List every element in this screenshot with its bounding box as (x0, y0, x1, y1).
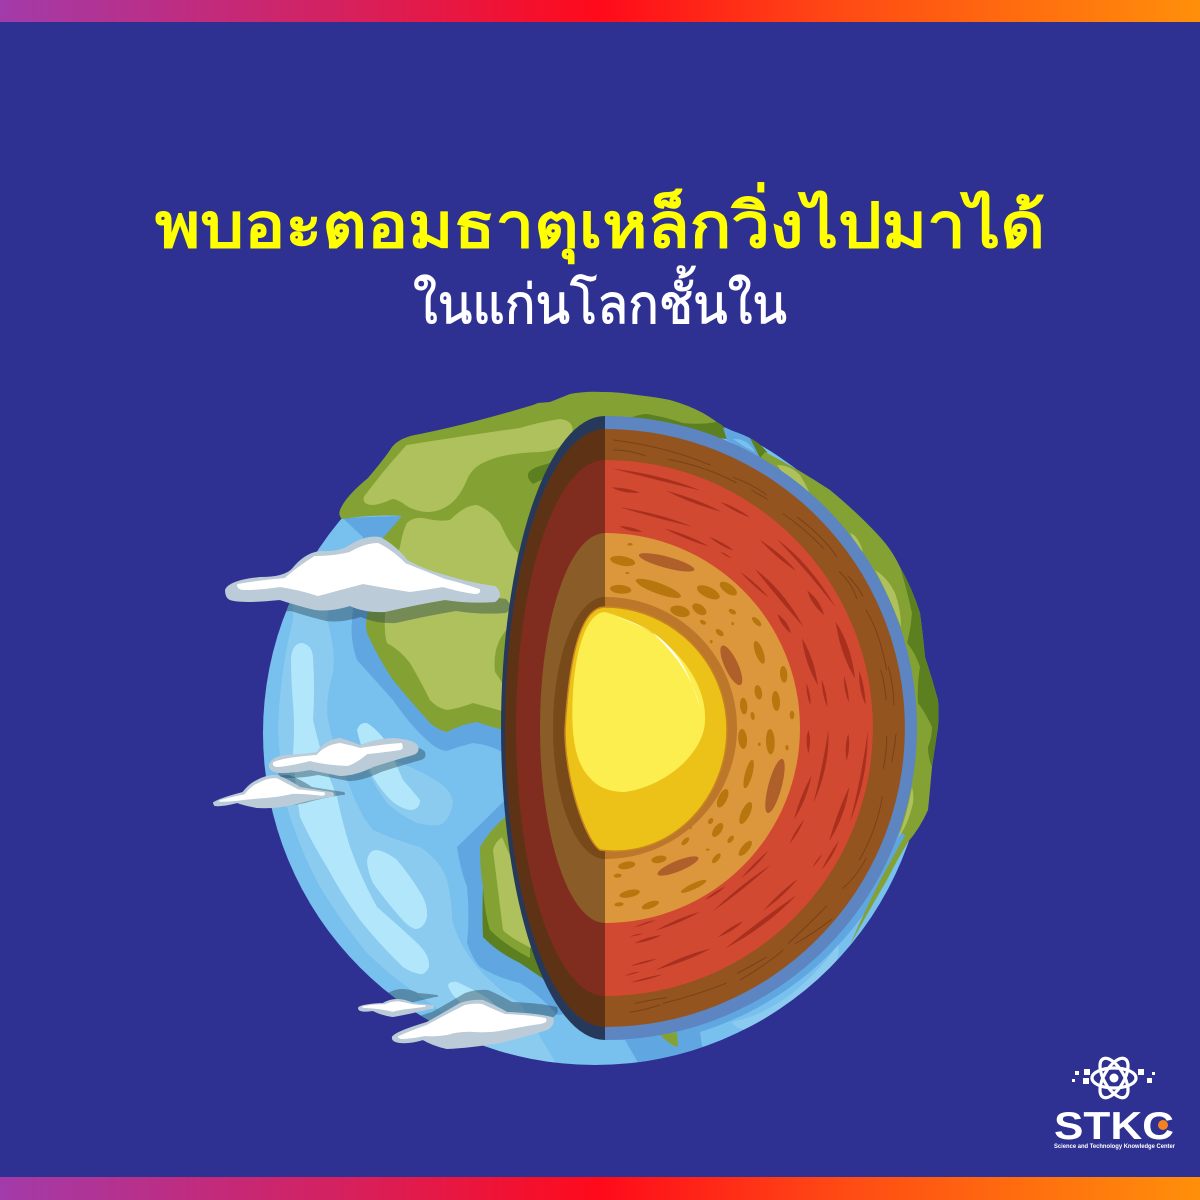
cloud: tiny lower (359, 1000, 433, 1016)
inner core (565, 607, 727, 851)
continent: north land (339, 392, 727, 732)
bottom gradient bar (0, 1177, 1200, 1200)
lower layer texture (614, 729, 896, 1012)
logo tagline: Science and Technology Knowledge Center (1054, 1143, 1175, 1150)
cloud: middle (270, 739, 418, 775)
cloud: small left (214, 776, 333, 807)
logo wordmark: STKC (1054, 1105, 1174, 1148)
crust and mantle right half (605, 416, 917, 1040)
title: พบอะตอมธาตุเหล็กวิ่งไปมาได้ (155, 182, 1045, 264)
clouds (214, 538, 553, 1048)
logo orange dot (1158, 1120, 1168, 1130)
earth illustration (214, 392, 938, 1070)
cloud: large upper (226, 538, 499, 611)
logo: STKC (1054, 1054, 1175, 1150)
continent: east land (700, 428, 938, 945)
upper layer texture (609, 440, 894, 720)
cloud shadows (226, 550, 558, 1037)
ocean globe (263, 401, 927, 1070)
top gradient bar (0, 0, 1200, 22)
subtitle: ในแก่นโลกชั้นใน (413, 266, 787, 335)
logo atom icon (1072, 1054, 1155, 1102)
cloud: lower large (393, 1001, 553, 1048)
dark left half (501, 416, 605, 1040)
continent: south land (480, 817, 678, 1047)
earth cross-section (501, 416, 917, 1040)
